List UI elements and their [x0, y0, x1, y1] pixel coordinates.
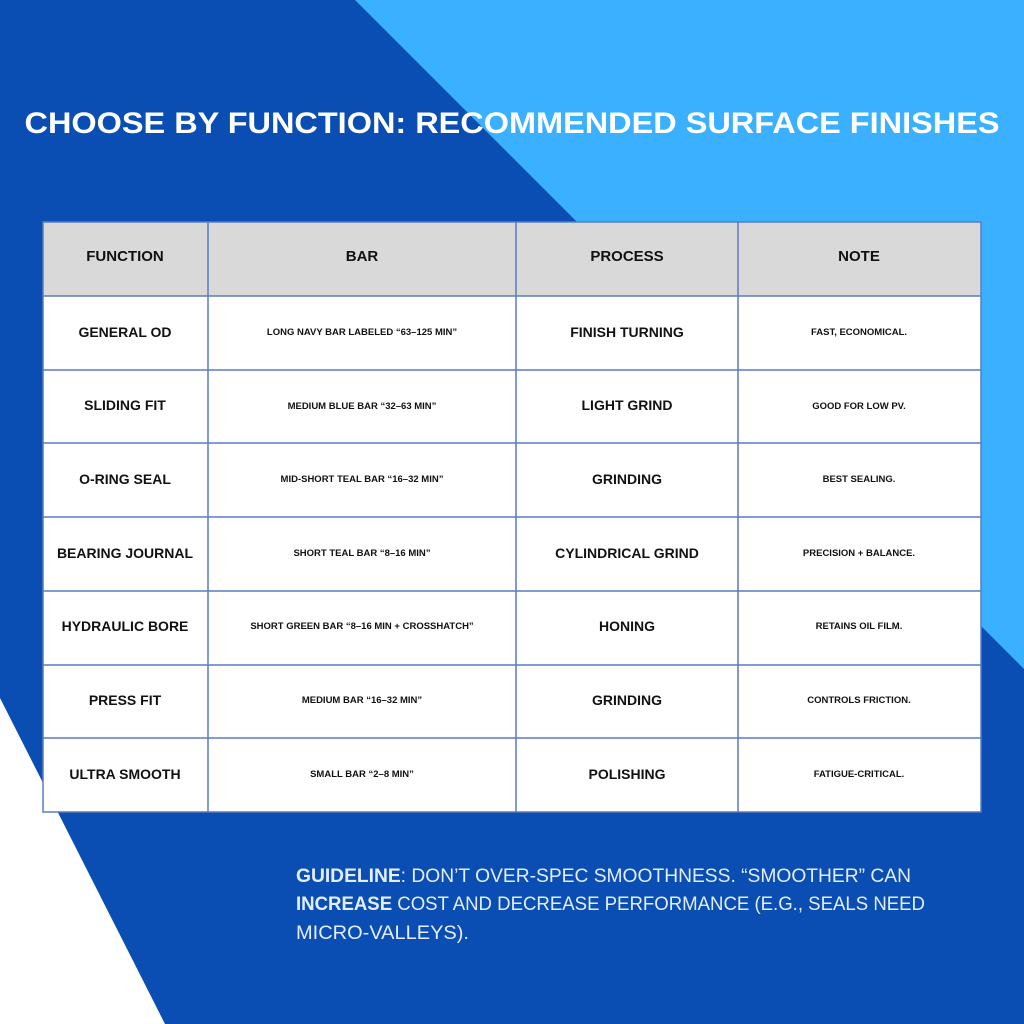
process column: CYLINDRICAL GRIND — [555, 545, 699, 561]
bar column: SHORT GREEN BAR “8–16 MIN + CROSSHATCH” — [250, 621, 474, 632]
table: recommended finishes — [43, 222, 981, 812]
note column: CONTROLS FRICTION. — [807, 695, 911, 706]
header row: NOTE — [838, 248, 880, 265]
bar column — [250, 327, 474, 780]
bar column: LONG NAVY BAR LABELED “63–125 MIN” — [267, 327, 457, 338]
note column: RETAINS OIL FILM. — [816, 621, 902, 632]
function column: BEARING JOURNAL — [57, 545, 194, 561]
bar column: SMALL BAR “2–8 MIN” — [310, 769, 414, 780]
header row: BAR — [346, 248, 378, 265]
bar column: SHORT TEAL BAR “8–16 MIN” — [293, 548, 431, 559]
process column: HONING — [599, 618, 655, 634]
process column: POLISHING — [588, 766, 666, 782]
function column — [57, 324, 194, 782]
process column: GRINDING — [592, 692, 662, 708]
function column: PRESS FIT — [89, 692, 162, 708]
guideline text: INCREASE COST AND DECREASE PERFORMANCE (E.G., SEALS NEED — [296, 894, 925, 915]
header row: PROCESS — [590, 248, 664, 265]
bar column: MEDIUM BLUE BAR “32–63 MIN” — [288, 401, 437, 412]
note column: FAST, ECONOMICAL. — [811, 327, 907, 338]
header row: FUNCTION — [86, 248, 164, 265]
function column: ULTRA SMOOTH — [69, 766, 181, 782]
function column: HYDRAULIC BORE — [62, 618, 188, 634]
process column: LIGHT GRIND — [582, 397, 672, 413]
note column: GOOD FOR LOW PV. — [812, 401, 906, 412]
title: CHOOSE BY FUNCTION: RECOMMENDED SURFACE FINISHES — [24, 107, 1000, 140]
function column: SLIDING FIT — [84, 397, 166, 413]
note column: PRECISION + BALANCE. — [803, 548, 915, 559]
bar column: MID-SHORT TEAL BAR “16–32 MIN” — [281, 474, 444, 485]
process column: GRINDING — [592, 471, 662, 487]
bar column: MEDIUM BAR “16–32 MIN” — [302, 695, 422, 706]
process column: FINISH TURNING — [570, 324, 684, 340]
note column: FATIGUE-CRITICAL. — [814, 769, 904, 780]
header row — [86, 248, 880, 265]
guideline text: MICRO-VALLEYS). — [296, 923, 469, 944]
guideline text — [296, 866, 925, 944]
guideline text: GUIDELINE: DON’T OVER-SPEC SMOOTHNESS. “SMOOTHER” CAN — [296, 866, 911, 887]
note column — [803, 327, 915, 780]
function column: O-RING SEAL — [79, 471, 171, 487]
note column: BEST SEALING. — [823, 474, 895, 485]
process column — [555, 324, 699, 782]
function column: GENERAL OD — [78, 324, 172, 340]
